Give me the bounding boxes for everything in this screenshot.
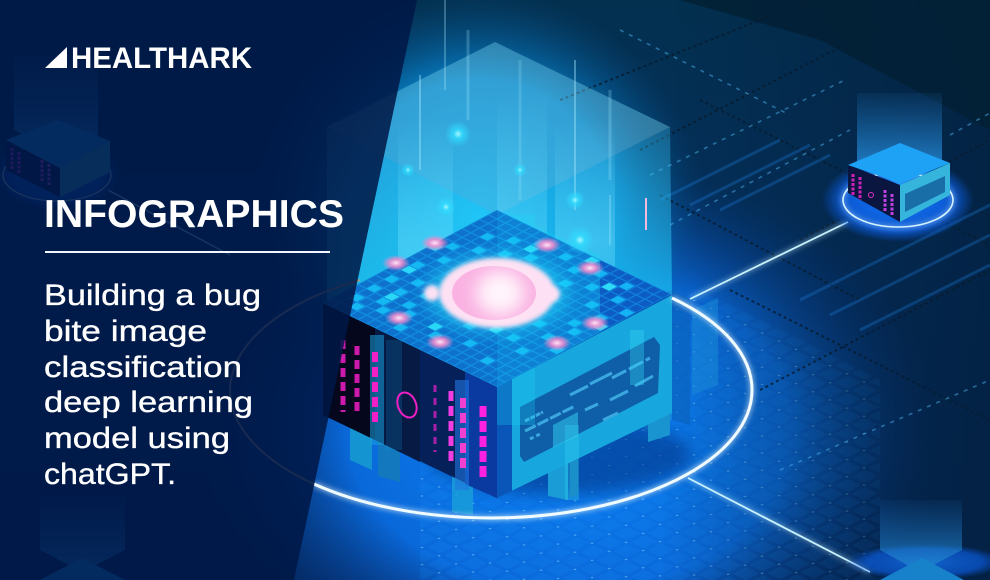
floor tile texture [420, 290, 880, 580]
top-left mini server [0, 55, 230, 255]
description text: model using [44, 422, 230, 455]
holographic streaks over cube [497, 215, 644, 500]
logo wordmark: HEALTHARK [71, 42, 252, 75]
bottom-right mini server [845, 500, 990, 580]
heading: INFOGRAPHICS [44, 193, 344, 236]
orbit ring [230, 280, 752, 518]
logo [45, 42, 252, 75]
central glowing chip [424, 253, 569, 333]
hologram column [327, 0, 672, 390]
right mini server [822, 93, 974, 242]
cube right face [497, 295, 672, 498]
pink status lights [343, 340, 483, 479]
dark diagonal panel [0, 0, 417, 580]
description text: deep learning [44, 386, 253, 419]
cube legs [350, 392, 670, 515]
icon: logo triangle [45, 47, 67, 68]
description text [44, 279, 261, 491]
description text: chatGPT. [44, 458, 176, 491]
right side shade [660, 0, 990, 580]
connector lines [688, 222, 870, 572]
circuit lines [560, 0, 990, 470]
status ring [394, 390, 420, 420]
description text: bite image [44, 315, 207, 348]
divider [45, 251, 330, 253]
cube left face [323, 303, 497, 498]
glow sparks [401, 121, 594, 254]
description text: classification [44, 351, 242, 384]
server cube [323, 210, 690, 515]
bottom-left mini server [40, 495, 125, 580]
label plate [520, 337, 660, 462]
back legs [645, 290, 718, 432]
pink nodes [382, 235, 609, 351]
cube top [323, 210, 672, 387]
description text: Building a bug [44, 279, 261, 312]
